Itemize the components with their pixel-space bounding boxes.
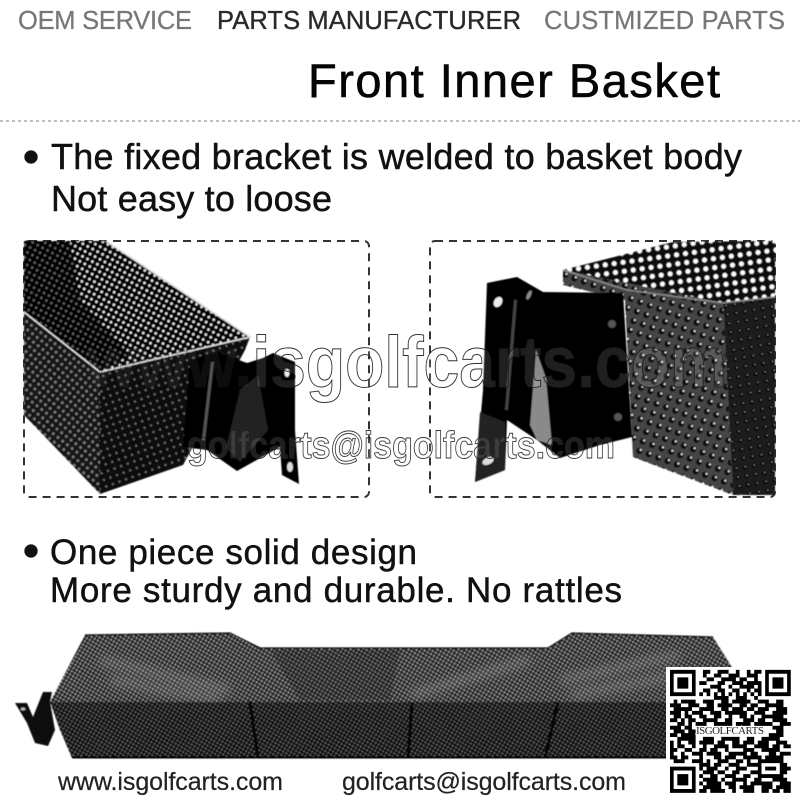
panel: left bracket photo bbox=[24, 241, 369, 497]
bullet text line 2: Not easy to loose bbox=[51, 178, 332, 219]
basket left face bbox=[24, 312, 100, 494]
bullet text line 1: One piece solid design bbox=[50, 533, 417, 572]
contact: website: www.isgolfcarts.com bbox=[57, 768, 283, 796]
contact: email: golfcarts@isgolfcarts.com bbox=[342, 768, 626, 796]
mounting bracket bbox=[475, 277, 632, 482]
basket front mesh bbox=[50, 702, 740, 758]
basket side face bbox=[723, 297, 775, 495]
header service labels: OEM SERVICE bbox=[18, 7, 192, 35]
basket inside mesh bbox=[24, 241, 299, 494]
end bracket bbox=[15, 692, 55, 746]
basket front face bbox=[563, 270, 733, 495]
feature text: one piece design bbox=[24, 533, 622, 610]
bullet text line 1: The fixed bracket is welded to basket body bbox=[51, 136, 742, 177]
mounting bracket bbox=[183, 352, 299, 484]
feature text: fixed bracket bbox=[24, 136, 742, 219]
basket front face bbox=[100, 337, 250, 494]
header service labels: CUSTMIZED PARTS bbox=[544, 7, 785, 35]
bullet bbox=[24, 544, 38, 558]
watermark: email: golfcarts@isgolfcarts.com bbox=[187, 425, 615, 467]
title: Front Inner Basket bbox=[308, 54, 720, 107]
bullet bbox=[24, 150, 38, 164]
basket top mesh bbox=[563, 241, 775, 303]
QR code bbox=[666, 667, 800, 800]
header service labels: PARTS MANUFACTURER bbox=[217, 7, 521, 35]
basket inner back mesh bbox=[50, 633, 740, 702]
QR brand label: ISGOLFCARTS bbox=[696, 725, 764, 737]
bullet text line 2: More sturdy and durable. No rattles bbox=[50, 571, 622, 610]
watermark: website: www.isgolfcarts.com bbox=[86, 323, 727, 403]
panel: full basket photo bbox=[15, 633, 740, 758]
panel: right bracket photo bbox=[430, 241, 775, 497]
header service labels bbox=[18, 7, 785, 35]
